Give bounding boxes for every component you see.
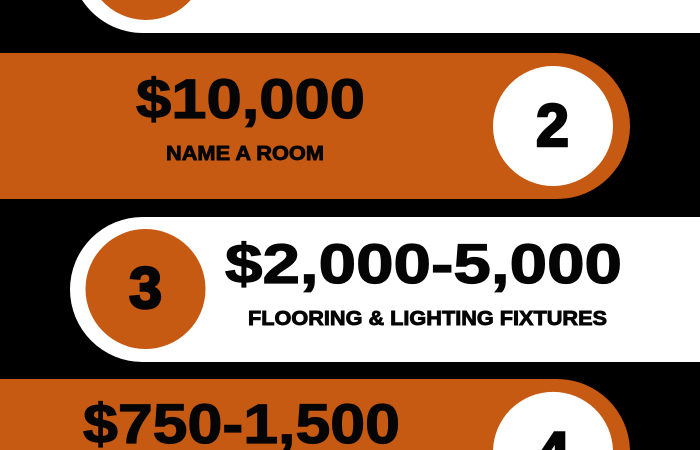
- tier 3 label: FLOORING & LIGHTING FIXTURES: [248, 307, 607, 330]
- panel: tier 1: [82, 0, 700, 33]
- tier 2 label: NAME A ROOM: [166, 142, 324, 165]
- icon: tier 4 number badge: [493, 392, 613, 450]
- panel: tier 2: [0, 53, 630, 199]
- icon: tier 2 number badge: [493, 66, 613, 186]
- panel: tier 3: [70, 217, 700, 362]
- panel: tier 4: [0, 379, 630, 450]
- icon: tier 3 number badge: 3: [129, 256, 162, 321]
- icon: tier 1 number circle: [101, 0, 191, 20]
- tier 3 amount: $2,000-5,000: [225, 232, 622, 295]
- tier 2 amount: $10,000: [136, 67, 365, 130]
- icon: tier 3 number badge: [86, 229, 206, 349]
- icon: tier 2 number badge: 2: [536, 92, 569, 159]
